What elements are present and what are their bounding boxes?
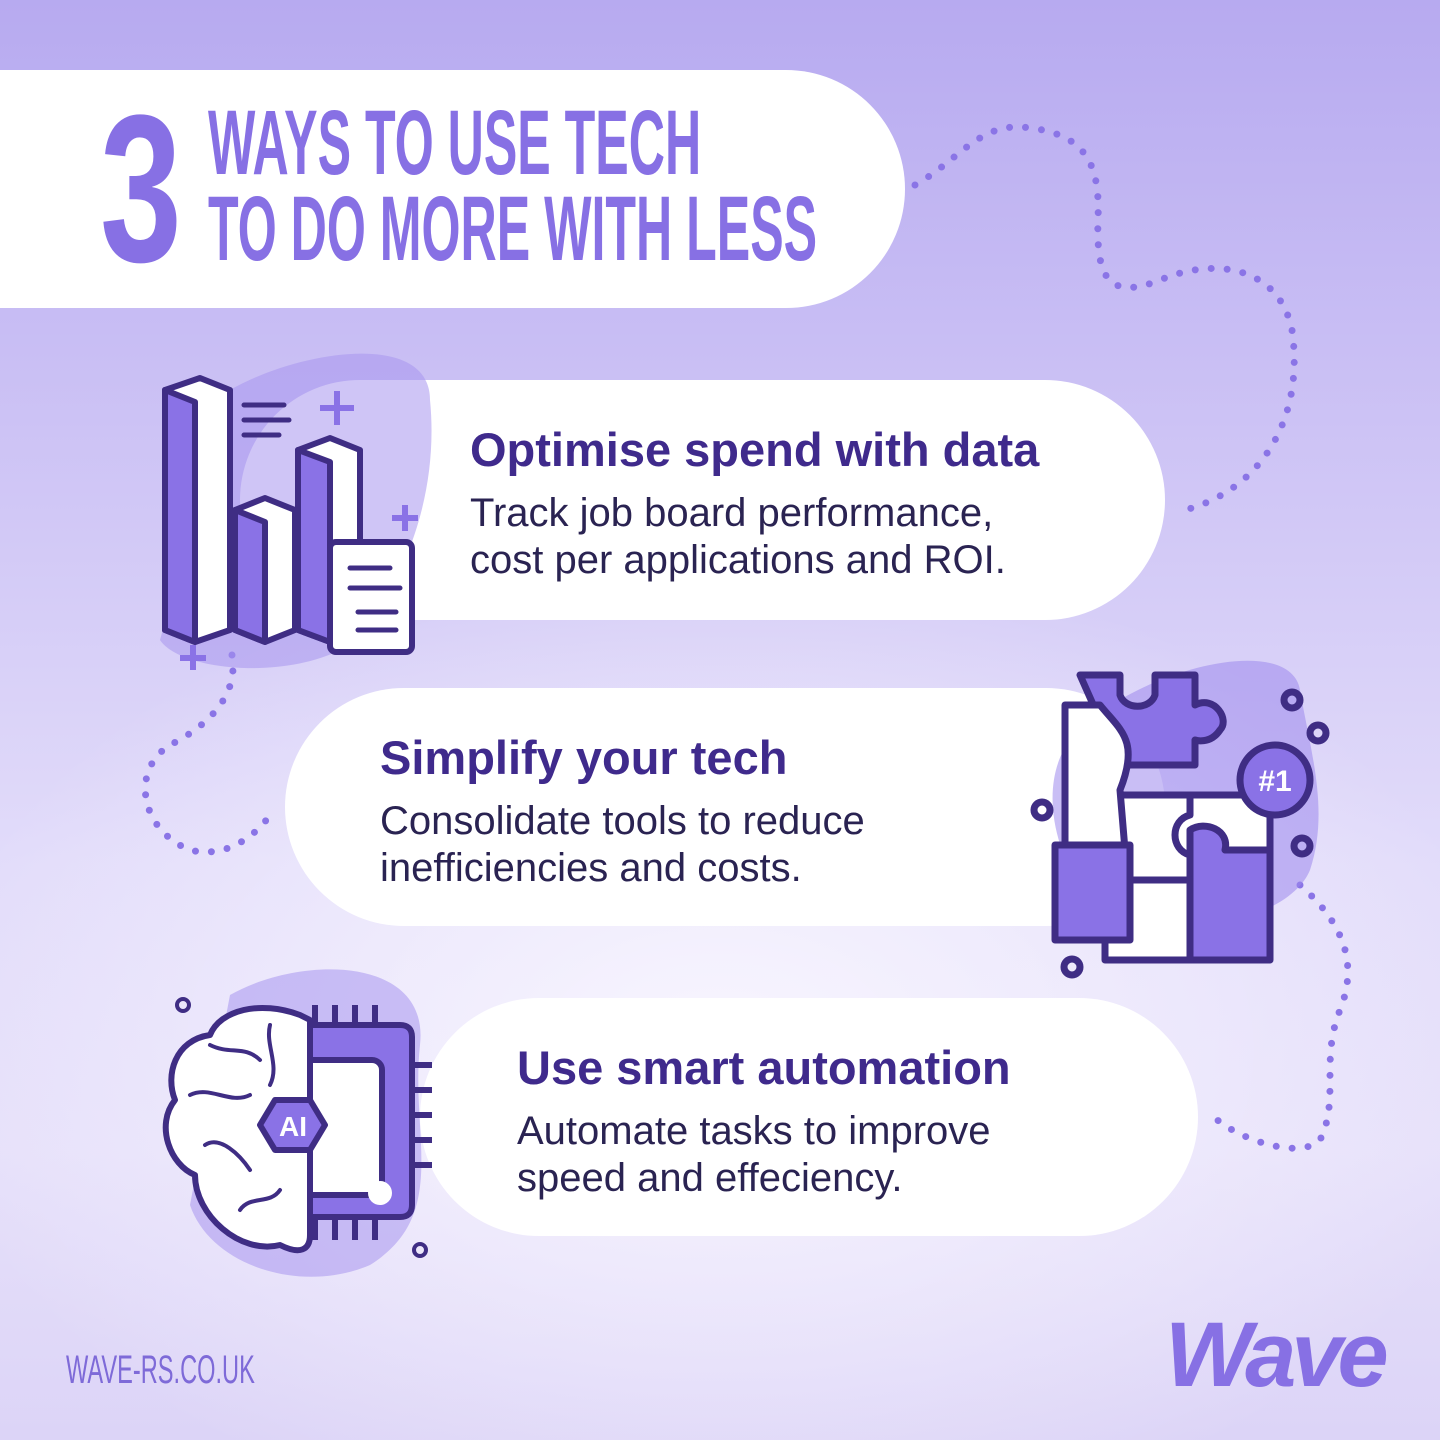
body 2: Consolidate tools to reduce [380, 799, 865, 843]
heading 1: Optimise spend with data [470, 423, 1039, 476]
card 2: simplify [285, 688, 1165, 926]
card 3: automation [420, 998, 1198, 1236]
title text: TO DO MORE WITH LESS [208, 178, 817, 280]
title text [208, 92, 817, 280]
heading 3: Use smart automation [517, 1041, 1011, 1094]
title number 3: 3 [100, 71, 182, 306]
body 3: Automate tasks to improve [517, 1109, 991, 1153]
body 2 [380, 799, 865, 890]
body 1: cost per applications and ROI. [470, 538, 1006, 582]
footer url: WAVE-RS.CO.UK [66, 1348, 255, 1392]
body 1: Track job board performance, [470, 491, 993, 535]
icon: bar chart [160, 354, 432, 670]
heading 2: Simplify your tech [380, 731, 787, 784]
logo: Wave: Wave [1165, 1304, 1384, 1406]
card 1: optimise spend [240, 380, 1165, 620]
icon: AI brain chip: AI [279, 1111, 307, 1142]
title text: WAYS TO USE TECH [208, 92, 701, 194]
icon: AI brain chip [162, 969, 432, 1277]
body 3 [517, 1109, 991, 1200]
title panel [0, 70, 905, 308]
body 2: inefficiencies and costs. [380, 846, 802, 890]
icon: puzzle hand [1030, 660, 1330, 978]
icon: puzzle hand: #1 [1258, 765, 1292, 798]
body 3: speed and effeciency. [517, 1156, 902, 1200]
body 1 [470, 491, 1006, 582]
